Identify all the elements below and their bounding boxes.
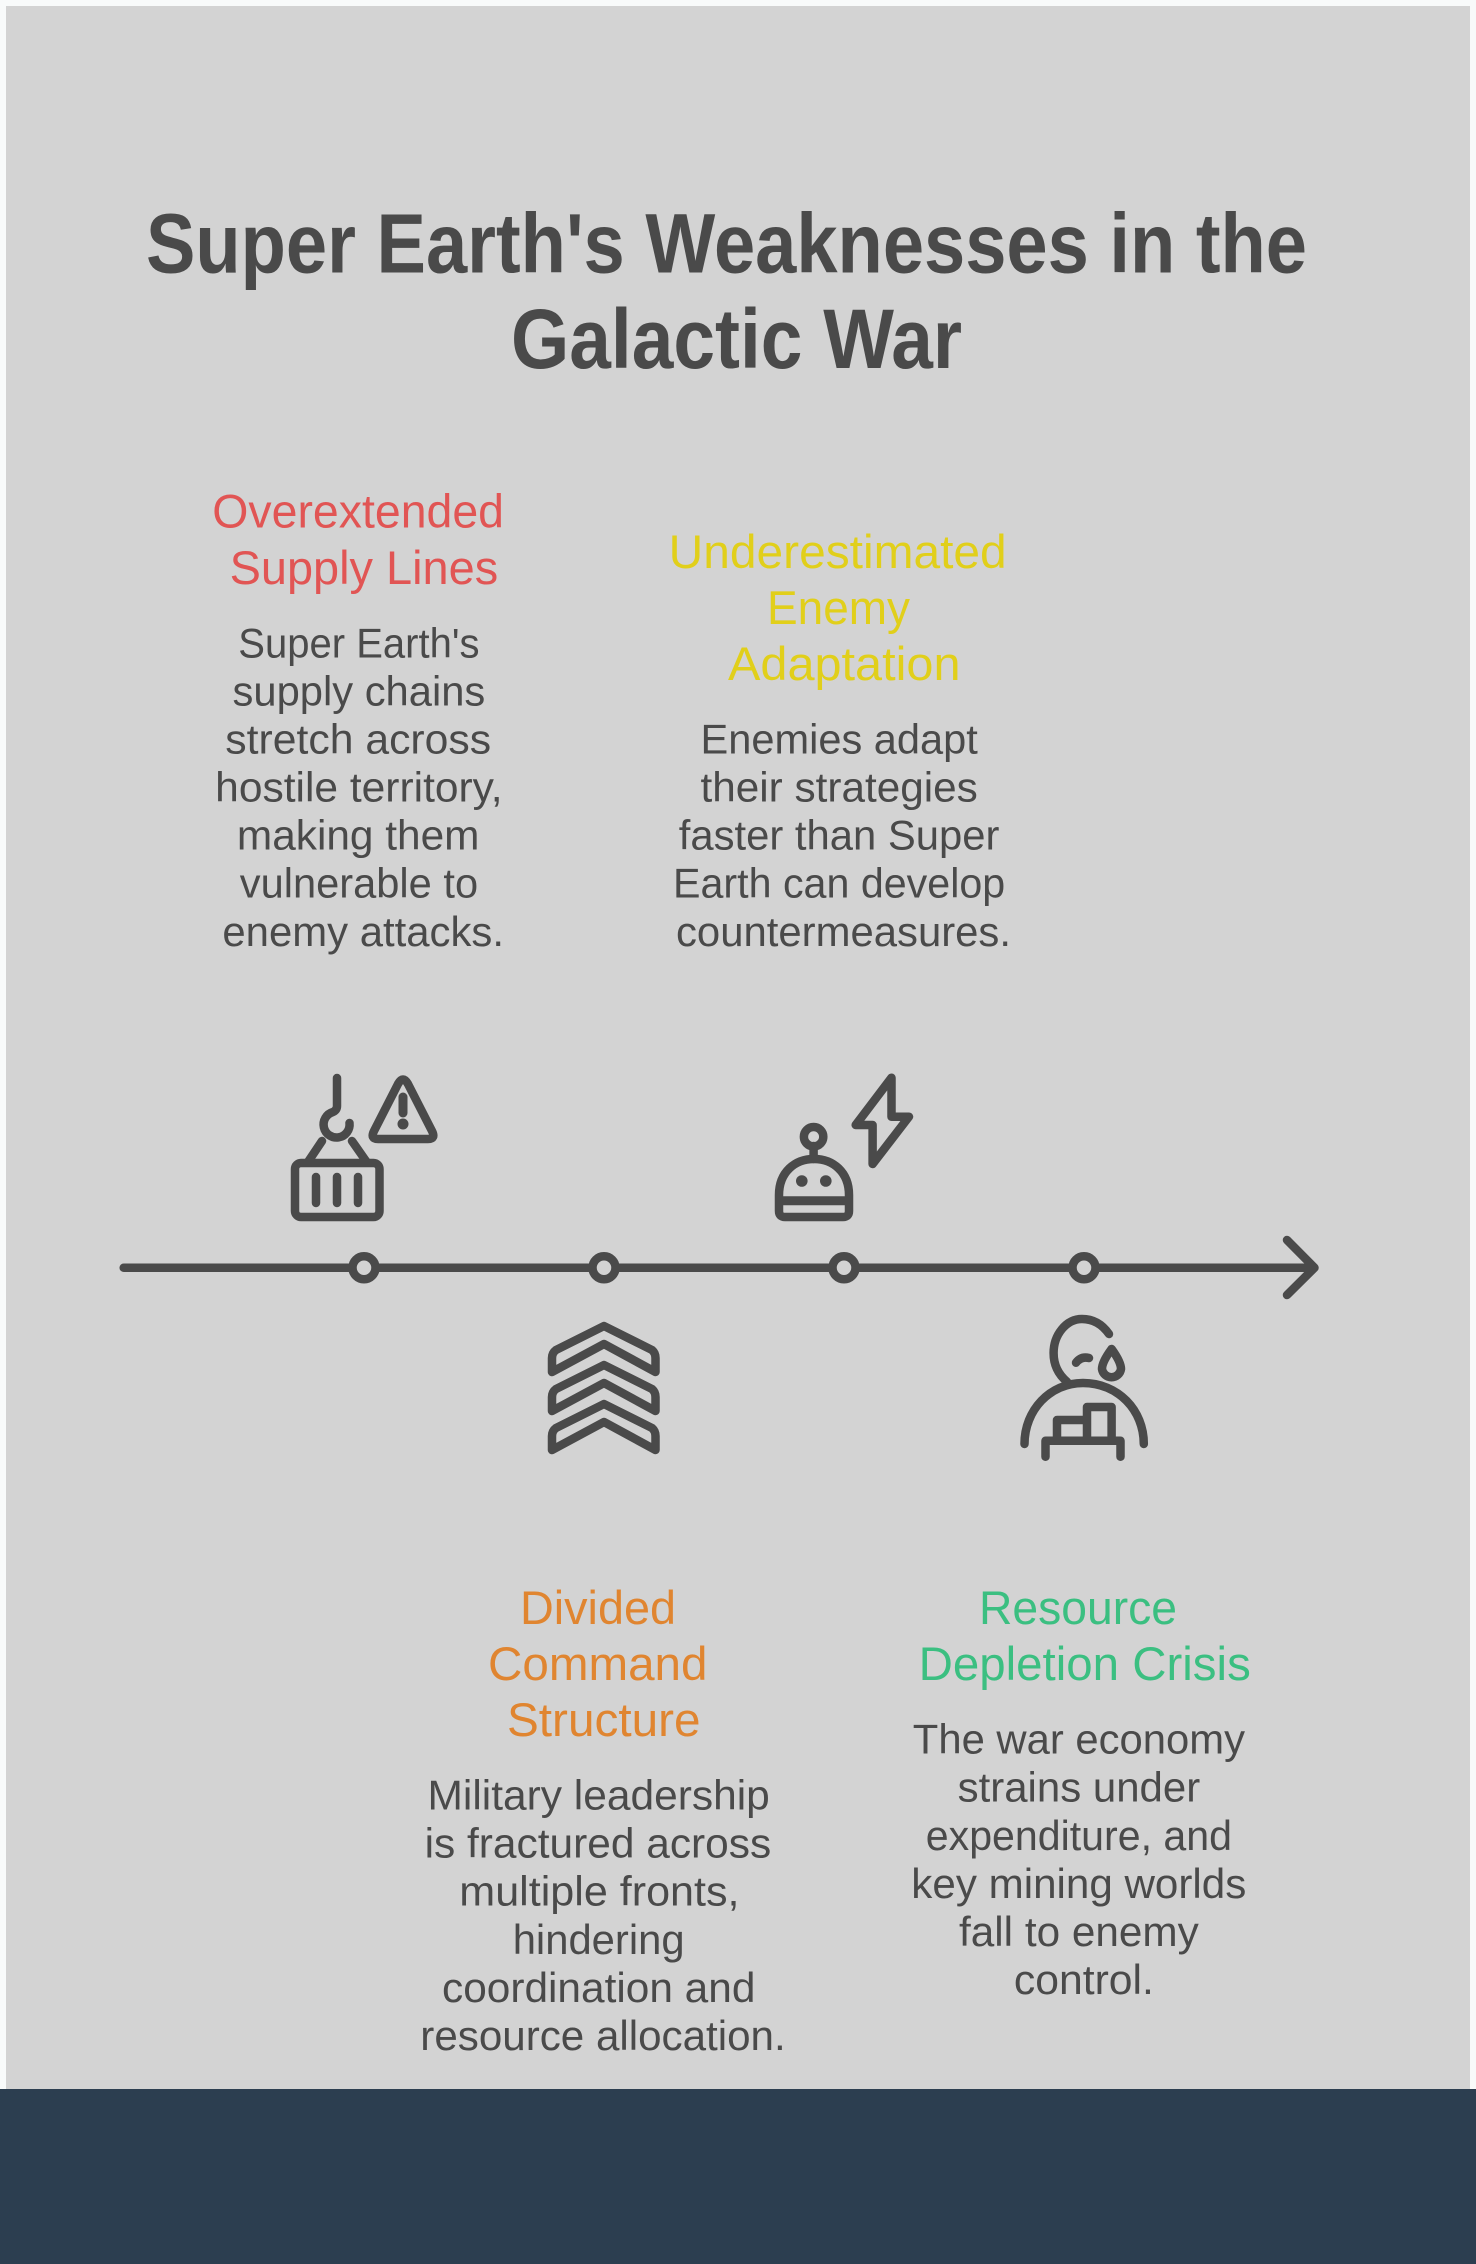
icon: stacked chevrons [552, 1326, 656, 1450]
title: Super Earth's Weaknesses in the [146, 196, 1307, 290]
text: supply lines description: Super Earth's [238, 620, 480, 666]
text: divided command description: resource allocation. [420, 2012, 786, 2059]
heading: Underestimated Enemy Adaptation: Adaptation [728, 637, 960, 690]
heading: Resource Depletion Crisis: Resource [979, 1581, 1177, 1634]
heading: Overextended Supply Lines: Overextended [212, 484, 504, 538]
timeline marker 2 [592, 1256, 616, 1279]
text: supply lines description: enemy attacks. [222, 908, 504, 955]
text: enemy adaptation description: Earth can develop [673, 860, 1005, 906]
heading: Underestimated Enemy Adaptation: Underestimated [669, 525, 1007, 578]
heading: Resource Depletion Crisis: Depletion Crisis [919, 1637, 1251, 1690]
text: supply lines description: vulnerable to [240, 860, 478, 906]
text: resource depletion description: fall to enemy [959, 1908, 1199, 1955]
text: supply lines description [215, 620, 504, 955]
timeline marker 1 [352, 1256, 376, 1279]
text: supply lines description: supply chains [232, 668, 485, 714]
text: supply lines description: making them [237, 812, 480, 858]
icon: container on hook [295, 1078, 380, 1217]
text: enemy adaptation description: Enemies adapt [700, 716, 978, 762]
heading: Divided Command Structure [488, 1581, 708, 1746]
icon: robot [779, 1127, 849, 1217]
heading: Resource Depletion Crisis [919, 1581, 1251, 1690]
text: enemy adaptation description [673, 716, 1011, 955]
heading: Underestimated Enemy Adaptation: Enemy [767, 581, 910, 634]
text: divided command description: coordination and [442, 1964, 755, 2011]
text: resource depletion description: The war economy [913, 1716, 1245, 1762]
heading: Overextended Supply Lines: Supply Lines [230, 541, 498, 594]
text: divided command description: multiple fronts, [459, 1868, 740, 1914]
text: enemy adaptation description: faster than Super [679, 812, 999, 858]
text: resource depletion description [911, 1716, 1246, 2003]
text: divided command description: is fractured across [425, 1820, 771, 1866]
footer band [0, 2089, 1476, 2264]
text: divided command description: hindering [513, 1916, 685, 1963]
icon: lightning bolt [856, 1078, 909, 1164]
heading: Divided Command Structure: Command [488, 1637, 708, 1690]
text: resource depletion description: control. [1014, 1956, 1154, 2003]
timeline marker 3 [832, 1256, 856, 1279]
title: Galactic War [511, 292, 962, 386]
text: enemy adaptation description: their strategies [700, 764, 978, 810]
heading: Divided Command Structure: Divided [520, 1581, 676, 1634]
heading: Overextended Supply Lines [212, 484, 504, 594]
text: divided command description [420, 1772, 786, 2059]
timeline marker 4 [1072, 1256, 1096, 1279]
text: resource depletion description: key mining worlds [911, 1860, 1246, 1907]
text: resource depletion description: strains under [958, 1764, 1200, 1810]
icon: warning triangle [373, 1080, 433, 1139]
text: divided command description: Military leadership [428, 1772, 770, 1818]
text: resource depletion description: expenditure, and [926, 1812, 1232, 1859]
text: enemy adaptation description: countermeasures. [676, 908, 1011, 955]
text: supply lines description: hostile territory, [215, 764, 503, 810]
heading: Divided Command Structure: Structure [507, 1693, 700, 1746]
icon: crying person with resources [1024, 1319, 1144, 1457]
title [146, 196, 1307, 386]
heading: Underestimated Enemy Adaptation [669, 525, 1007, 690]
text: supply lines description: stretch across [225, 716, 491, 762]
timeline arrow [124, 1240, 1315, 1295]
